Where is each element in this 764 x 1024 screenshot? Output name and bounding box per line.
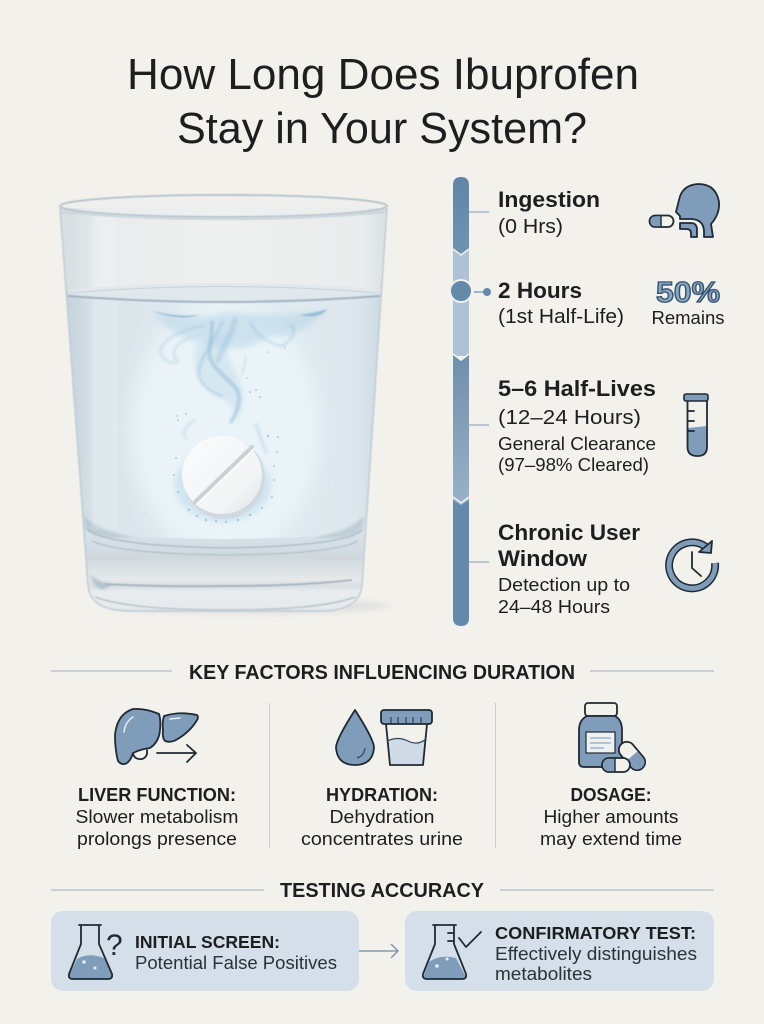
title [127, 50, 639, 153]
icon: water drop and urine cup [336, 710, 432, 765]
50% remains stat [652, 277, 724, 328]
tablet [182, 436, 265, 519]
step: chronic user: Window [498, 546, 588, 571]
timeline bar [450, 177, 491, 626]
icon: medicine bottle and pills [579, 703, 648, 773]
title: Stay in Your System? [177, 104, 587, 153]
factor: hydration [301, 785, 463, 849]
panel: initial screen: Potential False Positives [135, 953, 337, 973]
step: ingestion: Ingestion [498, 187, 600, 212]
factor: dosage: DOSAGE: [570, 785, 652, 805]
factor: hydration: concentrates urine [301, 828, 463, 849]
icon: flask with question mark: ? [106, 929, 123, 962]
step: chronic user: Chronic User [498, 520, 640, 545]
icon: clock with arrow [669, 541, 715, 588]
panel: initial screen [51, 911, 359, 991]
step: chronic user: 24–48 Hours [498, 597, 610, 617]
panel: confirmatory test: Effectively distinguishes [495, 944, 697, 964]
factor: liver function: Slower metabolism [76, 806, 238, 827]
step: ingestion: (0 Hrs) [498, 216, 563, 238]
blue dissolving swirl [152, 309, 328, 523]
panel: confirmatory test: metabolites [495, 964, 592, 984]
50% remains stat: 50% [656, 277, 720, 309]
factor: dosage: Higher amounts [544, 806, 678, 827]
step: half-lives: General Clearance [498, 434, 656, 454]
step: ingestion [498, 187, 600, 238]
factor: hydration: Dehydration [330, 806, 434, 827]
factor: dosage [540, 785, 682, 849]
factor: dosage: may extend time [540, 828, 682, 849]
icon: head swallowing pill [650, 184, 719, 237]
section heading: testing accuracy: TESTING ACCURACY [280, 880, 485, 902]
step: half-lives: 5–6 Half-Lives [498, 376, 656, 401]
step: half-lives [498, 376, 656, 475]
panel: confirmatory test [405, 911, 714, 991]
panel: confirmatory test: CONFIRMATORY TEST: [495, 923, 696, 943]
step: half-lives: (97–98% Cleared) [498, 455, 649, 475]
step: half-lives: (12–24 Hours) [498, 407, 641, 429]
50% remains stat: Remains [652, 307, 724, 328]
step: chronic user [498, 520, 640, 617]
factor: liver function: LIVER FUNCTION: [78, 785, 236, 805]
section heading: key factors: KEY FACTORS INFLUENCING DURATION [189, 662, 575, 684]
step: 2 hours [498, 278, 624, 328]
icon: flask with question mark [69, 925, 123, 979]
icon: liver with arrow [115, 709, 198, 764]
factor: liver function: prolongs presence [77, 828, 237, 849]
step: 2 hours: 2 Hours [498, 278, 582, 303]
glass outline and rim [60, 195, 387, 611]
water surface [68, 283, 380, 303]
arrow between tests [359, 944, 398, 958]
panel: initial screen: INITIAL SCREEN: [135, 932, 280, 952]
step: chronic user: Detection up to [498, 575, 630, 595]
glass of water with dissolving tablet [55, 195, 390, 615]
factor: liver function [76, 785, 238, 849]
title: How Long Does Ibuprofen [127, 50, 639, 99]
icon: flask with check mark [423, 925, 481, 979]
icon: test tube [684, 394, 708, 456]
timeline marker [450, 280, 472, 302]
bubbles [173, 347, 286, 523]
factor: hydration: HYDRATION: [326, 785, 438, 805]
step: 2 hours: (1st Half-Life) [498, 306, 624, 328]
